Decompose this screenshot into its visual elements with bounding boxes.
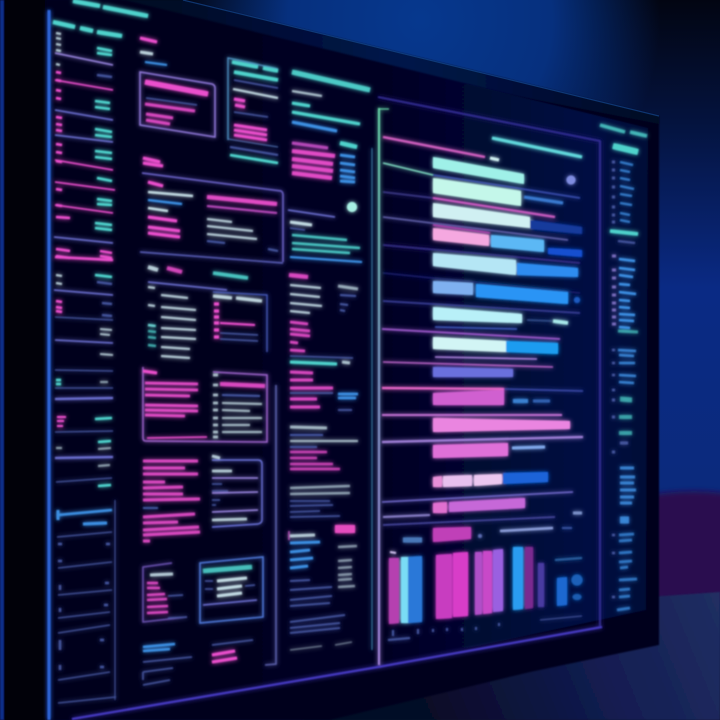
label group upper centre: [140, 38, 167, 166]
sidebar left labels: [56, 33, 62, 284]
list row with tags: [148, 267, 248, 358]
panel: box two: [228, 58, 278, 163]
right sidebar group two: [612, 256, 616, 324]
upper bezel lit band: [120, 0, 659, 124]
text column three middle: [289, 275, 358, 364]
left edge light strip: [0, 0, 4, 720]
sidebar teal values: [95, 48, 112, 277]
right sidebar: [600, 125, 647, 610]
chart rules: [383, 137, 485, 157]
text column three top: [292, 72, 370, 182]
left sidebar panel lower: [55, 370, 116, 703]
floor: [300, 592, 720, 720]
main vertical divider: [378, 108, 380, 665]
horizontal bars: [433, 157, 582, 542]
text column three lower: [290, 372, 358, 517]
vertical rule: [265, 385, 276, 665]
sidebar grey values: [97, 75, 112, 316]
sidebar dividers upper: [55, 53, 113, 65]
panel: box eight: [200, 557, 263, 623]
left sidebar panel: [53, 1, 148, 355]
screen left border: [48, 10, 50, 720]
column chart: [388, 547, 582, 640]
status dot: [347, 202, 357, 212]
screen bottom border: [72, 627, 602, 719]
right column divider: [371, 148, 373, 650]
monitor top edge: [183, 0, 659, 116]
panel: box six: [212, 456, 262, 527]
pink button: [335, 525, 355, 533]
chart annotations: [383, 176, 582, 560]
sidebar top heading: [53, 1, 148, 36]
panel: box four: [213, 292, 267, 352]
right sidebar group three: [618, 350, 636, 383]
panel: main chart: [378, 97, 600, 640]
panel: box seven: [143, 563, 187, 622]
text block beside status dot: [288, 210, 362, 262]
pink text block: [143, 461, 200, 541]
chart frame: [378, 97, 600, 627]
right sidebar group one: [612, 162, 615, 222]
column chart axis ticks: [388, 623, 499, 640]
lower left text: [143, 640, 253, 685]
panel: box three: [140, 173, 283, 263]
sidebar lower labels: [56, 380, 112, 486]
right sidebar group four: [619, 417, 632, 433]
sidebar lower dividers: [55, 370, 116, 703]
right sidebar heading: [600, 125, 647, 136]
purple sofa at right: [650, 491, 720, 600]
panel: box five: [143, 367, 267, 442]
text column three bottom: [289, 531, 357, 650]
panel: box one: [140, 72, 215, 137]
right sidebar group five: [620, 516, 629, 524]
